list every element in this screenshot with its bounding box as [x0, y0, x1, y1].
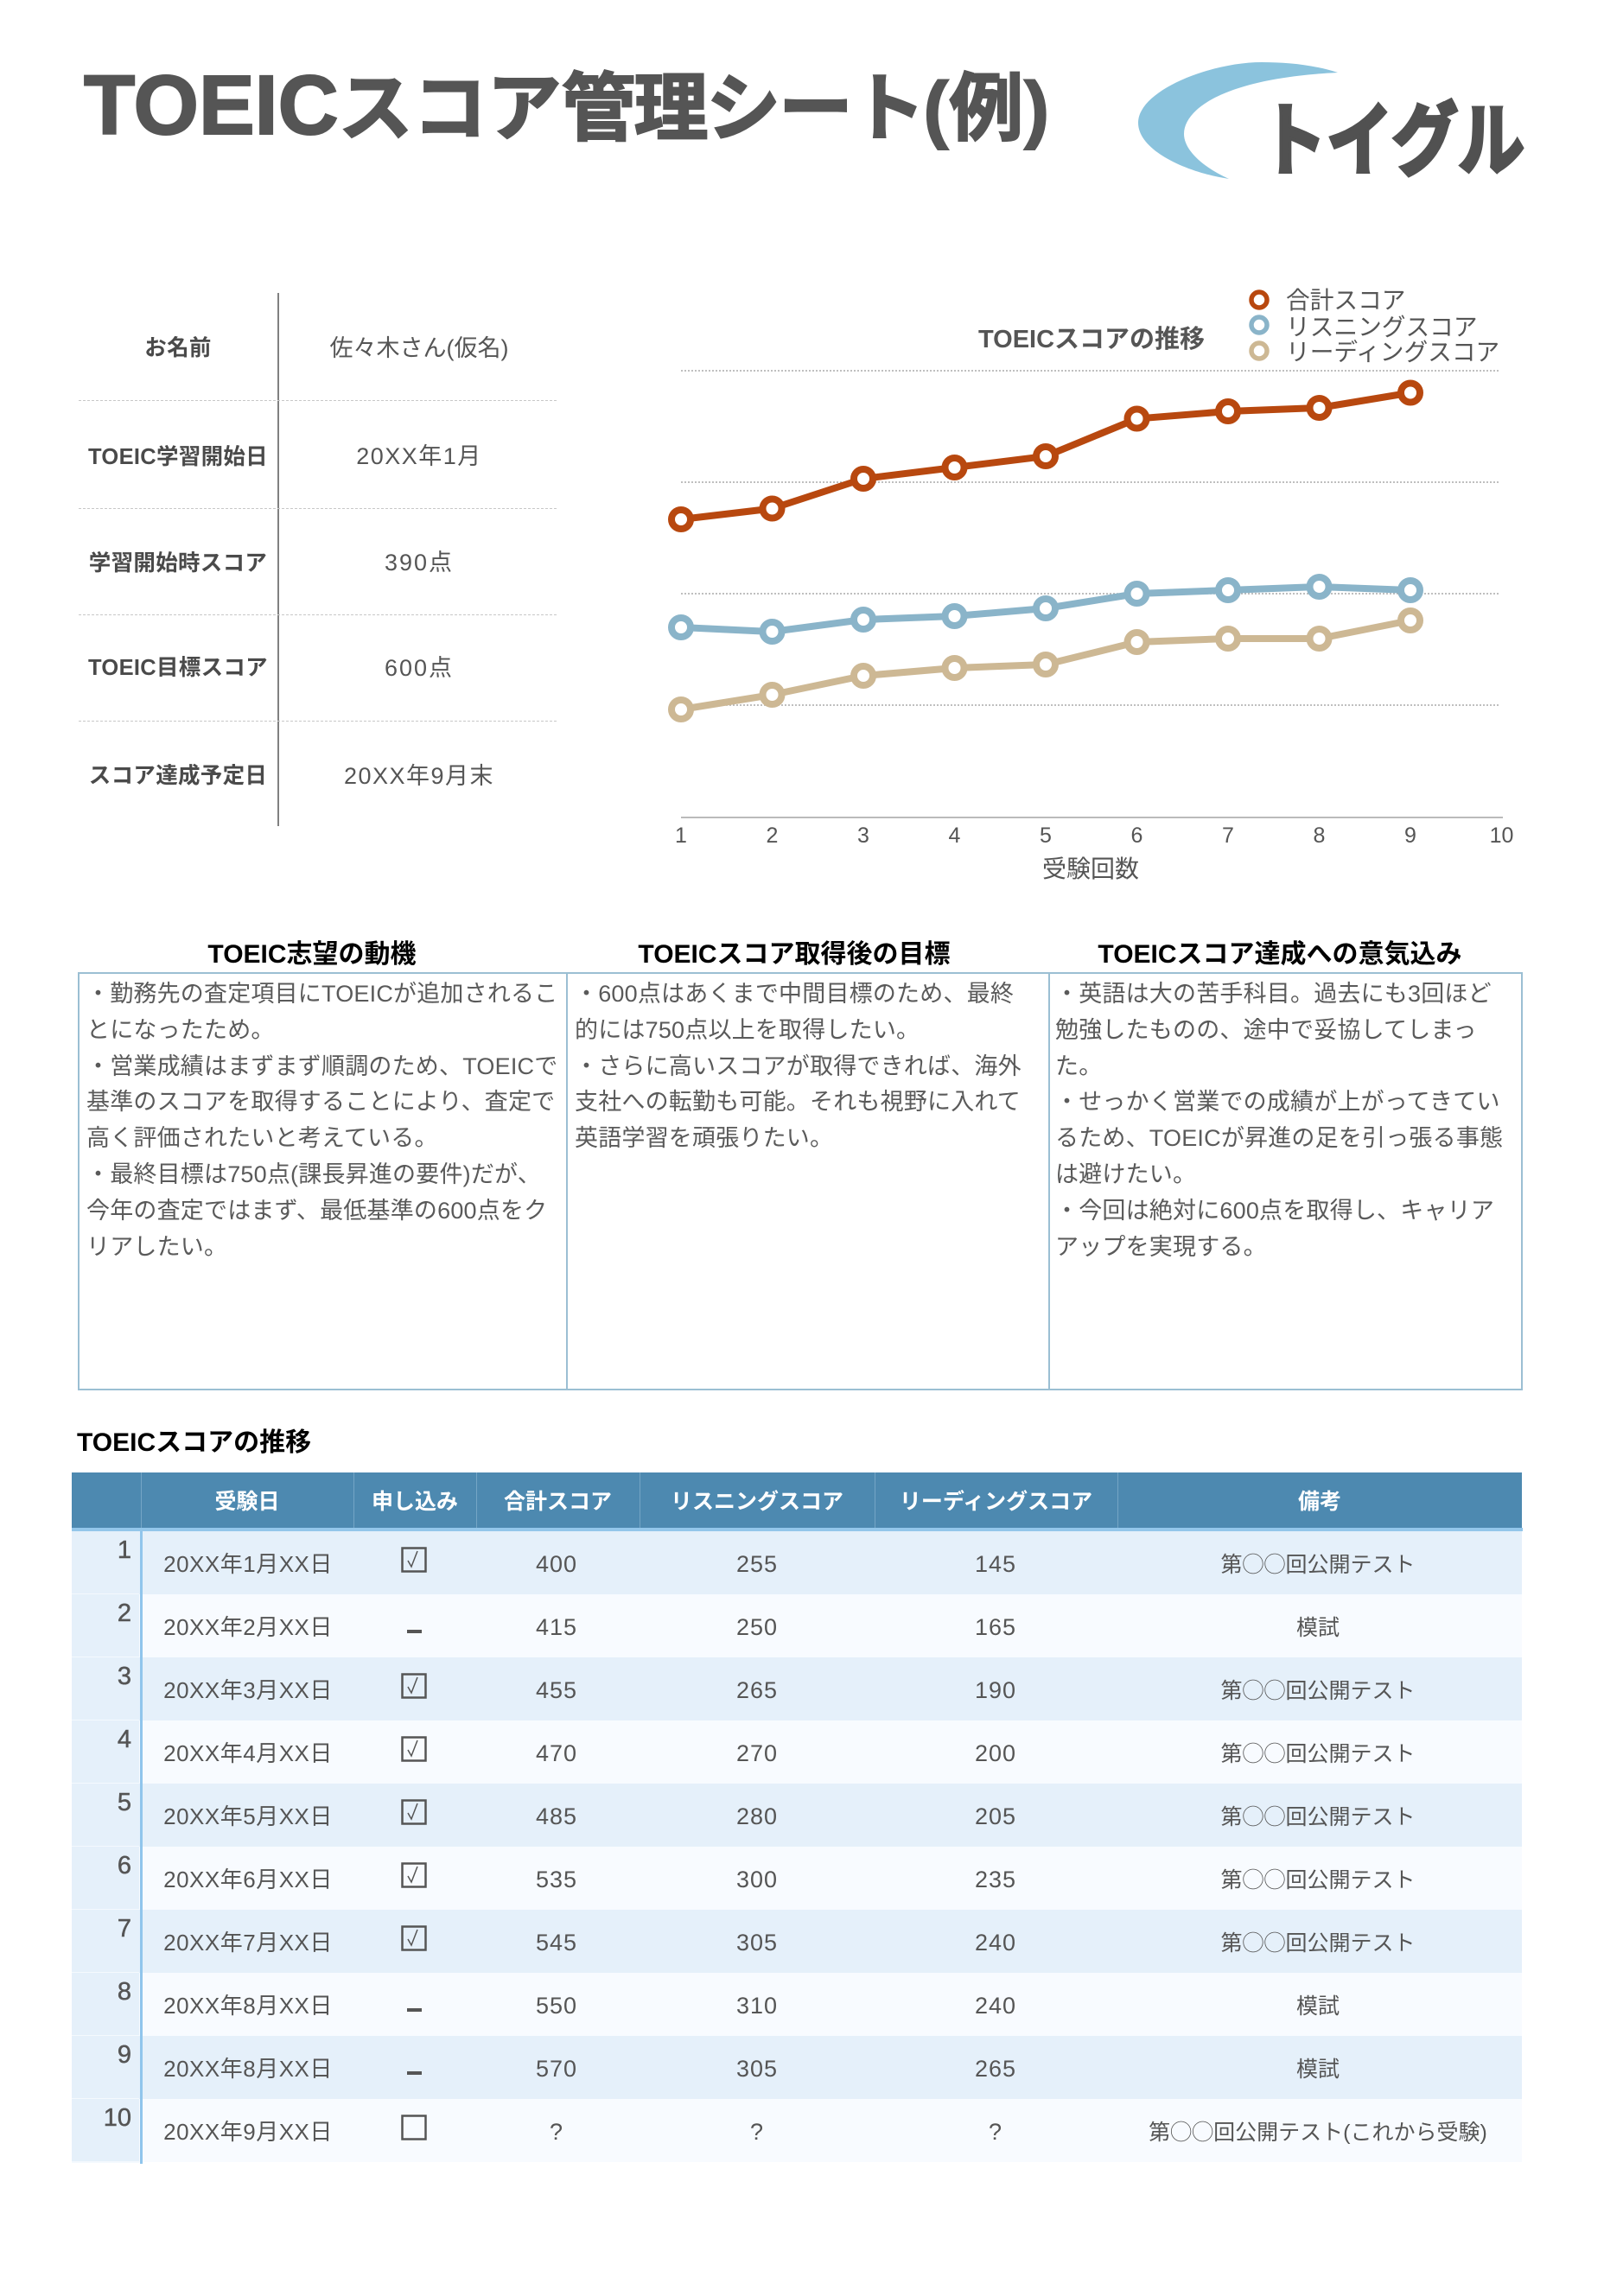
- icon: logo crescent: [1138, 62, 1338, 179]
- legend: 合計スコア: [1286, 287, 1405, 314]
- row 3: 3: [118, 1663, 131, 1690]
- table heading: TOEICスコアの推移: [77, 1428, 311, 1457]
- text: motivation: 高く評価されたいと考えている。: [86, 1125, 438, 1151]
- row 5: 280: [736, 1803, 778, 1829]
- row 10: ?: [550, 2119, 563, 2145]
- row 8: 550: [536, 1993, 577, 2019]
- text: determination: 勉強したものの、途中で妥協してしまっ: [1055, 1017, 1477, 1043]
- row 5: [72, 1784, 1522, 1847]
- series: total score: [671, 384, 1420, 529]
- row 1: 20XX年1月XX日: [163, 1551, 333, 1577]
- row 10: 10: [104, 2104, 131, 2132]
- row 10: 20XX年9月XX日: [163, 2119, 333, 2145]
- x axis labels: [675, 824, 1513, 848]
- row 10: ?: [750, 2119, 764, 2145]
- text: determination: ・せっかく営業での成績が上がってきてい: [1055, 1089, 1500, 1115]
- x axis labels: 6: [1131, 824, 1142, 848]
- row 2: 2: [118, 1600, 131, 1627]
- row 9: 265: [975, 2056, 1016, 2082]
- row 2: 250: [736, 1614, 778, 1640]
- text: motivation: 基準のスコアを取得することにより、査定で: [86, 1089, 555, 1115]
- row 1: [72, 1531, 1522, 1594]
- series: listening score: [671, 577, 1420, 641]
- row 9: 模試: [1296, 2057, 1340, 2082]
- row 3: 20XX年3月XX日: [163, 1677, 333, 1703]
- text: post-score goal: 支社への転勤も可能。それも視野に入れて: [575, 1089, 1021, 1115]
- row 3: 190: [975, 1677, 1016, 1703]
- start score value: 390点: [385, 550, 454, 576]
- row 7: [72, 1910, 1522, 1973]
- row 8: 模試: [1296, 1994, 1340, 2019]
- score table: 申し込み: [372, 1490, 458, 1514]
- score table: 合計スコア: [504, 1490, 612, 1514]
- row 10: 第◯◯回公開テスト(これから受験): [1149, 2121, 1487, 2145]
- row 5: 485: [536, 1803, 577, 1829]
- score table: 備考: [1298, 1490, 1341, 1514]
- target date value: 20XX年9月末: [344, 763, 494, 789]
- row 1: 1: [118, 1536, 131, 1564]
- text: determination: は避けたい。: [1055, 1161, 1196, 1187]
- row 6: 第◯◯回公開テスト: [1220, 1868, 1416, 1892]
- table header: [72, 1472, 1522, 1528]
- row 6: 535: [536, 1867, 577, 1892]
- row 1: 400: [536, 1551, 577, 1577]
- panel: text boxes: [78, 972, 1523, 1390]
- text: motivation: ・営業成績はまずまず順調のため、TOEICで: [86, 1053, 557, 1079]
- row 2: 165: [975, 1614, 1016, 1640]
- row 9: 305: [736, 2056, 778, 2082]
- row 7: 545: [536, 1930, 577, 1956]
- start date label: TOEIC学習開始日: [88, 445, 268, 469]
- row 7: 305: [736, 1930, 778, 1956]
- row 2: 415: [536, 1614, 577, 1640]
- text: determination: [1055, 981, 1503, 1260]
- x axis labels: 2: [767, 824, 778, 848]
- name value: 佐々木さん(仮名): [330, 335, 508, 361]
- row 4: 470: [536, 1740, 577, 1766]
- row 5: 205: [975, 1803, 1016, 1829]
- x axis labels: 1: [675, 824, 687, 848]
- x axis labels: 7: [1222, 824, 1234, 848]
- row 1: 255: [736, 1551, 778, 1577]
- row 4: 270: [736, 1740, 778, 1766]
- panel: profile table: [79, 293, 557, 826]
- row 8: 240: [975, 1993, 1016, 2019]
- heading: determination: TOEICスコア達成への意気込み: [1098, 940, 1462, 969]
- text: determination: アップを実現する。: [1055, 1234, 1267, 1260]
- row 3: 265: [736, 1677, 778, 1703]
- text: post-score goal: [575, 981, 1022, 1151]
- row 6: 20XX年6月XX日: [163, 1867, 333, 1892]
- x axis labels: 5: [1040, 824, 1052, 848]
- row 7: 第◯◯回公開テスト: [1220, 1931, 1416, 1956]
- row 8: 20XX年8月XX日: [163, 1993, 333, 2019]
- row 7: 7: [118, 1915, 131, 1943]
- text: post-score goal: ・600点はあくまで中間目標のため、最終: [575, 981, 1014, 1007]
- name label: お名前: [144, 336, 212, 360]
- title: TOEICスコア管理シート(例): [84, 58, 1050, 152]
- heading: motivation: TOEIC志望の動機: [207, 940, 417, 969]
- row 7: 20XX年7月XX日: [163, 1930, 333, 1956]
- row 2: 模試: [1296, 1616, 1340, 1640]
- row 5: 20XX年5月XX日: [163, 1803, 333, 1829]
- x axis title: 受験回数: [1042, 855, 1139, 882]
- text: determination: ・英語は大の苦手科目。過去にも3回ほど: [1055, 981, 1492, 1007]
- row 3: 455: [536, 1677, 577, 1703]
- target score label: TOEIC目標スコア: [88, 656, 268, 680]
- row 9: 20XX年8月XX日: [163, 2056, 333, 2082]
- vertical divider: [277, 293, 279, 826]
- text: determination: るため、TOEICが昇進の足を引っ張る事態: [1055, 1125, 1503, 1151]
- row 8: [72, 1973, 1522, 2036]
- score table: リーディングスコア: [900, 1490, 1092, 1514]
- logo text: トイグル: [1260, 98, 1524, 186]
- start score label: 学習開始時スコア: [89, 551, 267, 576]
- text: determination: た。: [1055, 1053, 1102, 1079]
- row 5: 5: [118, 1789, 131, 1816]
- row 2: 20XX年2月XX日: [163, 1614, 333, 1640]
- target score value: 600点: [385, 655, 454, 681]
- text: post-score goal: ・さらに高いスコアが取得できれば、海外: [575, 1053, 1022, 1079]
- row 1: 145: [975, 1551, 1016, 1577]
- text: motivation: ・勤務先の査定項目にTOEICが追加されるこ: [86, 981, 557, 1007]
- row 9: 9: [118, 2041, 131, 2069]
- row 8: 8: [118, 1978, 131, 2006]
- row 7: 240: [975, 1930, 1016, 1956]
- score table: 受験日: [214, 1490, 280, 1514]
- row 5: 第◯◯回公開テスト: [1220, 1805, 1416, 1829]
- row 9: [72, 2036, 1522, 2099]
- row 9: 570: [536, 2056, 577, 2082]
- x axis labels: 10: [1490, 824, 1513, 848]
- legend: [1251, 287, 1499, 366]
- text: post-score goal: 英語学習を頑張りたい。: [575, 1125, 833, 1151]
- series: reading score: [671, 611, 1420, 719]
- row number divider: [140, 1531, 143, 2164]
- row 4: [72, 1720, 1522, 1784]
- text: motivation: [86, 981, 557, 1260]
- x axis labels: 4: [949, 824, 961, 848]
- row 3: [72, 1657, 1522, 1720]
- x axis labels: 3: [857, 824, 869, 848]
- legend: リスニングスコア: [1286, 314, 1478, 340]
- heading: post-score goal: TOEICスコア取得後の目標: [638, 940, 951, 969]
- text: determination: ・今回は絶対に600点を取得し、キャリア: [1055, 1198, 1494, 1224]
- text: motivation: 今年の査定ではまず、最低基準の600点をク: [86, 1198, 547, 1224]
- row 4: 4: [118, 1726, 131, 1753]
- text: motivation: とになったため。: [86, 1017, 275, 1043]
- row 4: 200: [975, 1740, 1016, 1766]
- row 3: 第◯◯回公開テスト: [1220, 1679, 1416, 1703]
- row 6: [72, 1847, 1522, 1910]
- row 6: 235: [975, 1867, 1016, 1892]
- text: motivation: リアしたい。: [86, 1234, 227, 1260]
- chart title: TOEICスコアの推移: [978, 325, 1205, 353]
- x axis labels: 9: [1404, 824, 1416, 848]
- target date label: スコア達成予定日: [89, 764, 267, 788]
- legend: リーディングスコア: [1286, 339, 1499, 366]
- x axis labels: 8: [1314, 824, 1325, 848]
- line chart: [668, 287, 1513, 882]
- score table: リスニングスコア: [671, 1490, 843, 1514]
- row 4: 20XX年4月XX日: [163, 1740, 333, 1766]
- row 8: 310: [736, 1993, 778, 2019]
- row 10: ?: [989, 2119, 1002, 2145]
- row 2: [72, 1594, 1522, 1657]
- row 10: [72, 2099, 1522, 2162]
- row 4: 第◯◯回公開テスト: [1220, 1742, 1416, 1766]
- text: post-score goal: 的には750点以上を取得したい。: [575, 1017, 920, 1043]
- text: motivation: ・最終目標は750点(課長昇進の要件)だが、: [86, 1161, 541, 1187]
- start date value: 20XX年1月: [356, 443, 482, 469]
- row 1: 第◯◯回公開テスト: [1220, 1553, 1416, 1577]
- row 6: 6: [118, 1852, 131, 1879]
- row 6: 300: [736, 1867, 778, 1892]
- logo: [1138, 62, 1524, 186]
